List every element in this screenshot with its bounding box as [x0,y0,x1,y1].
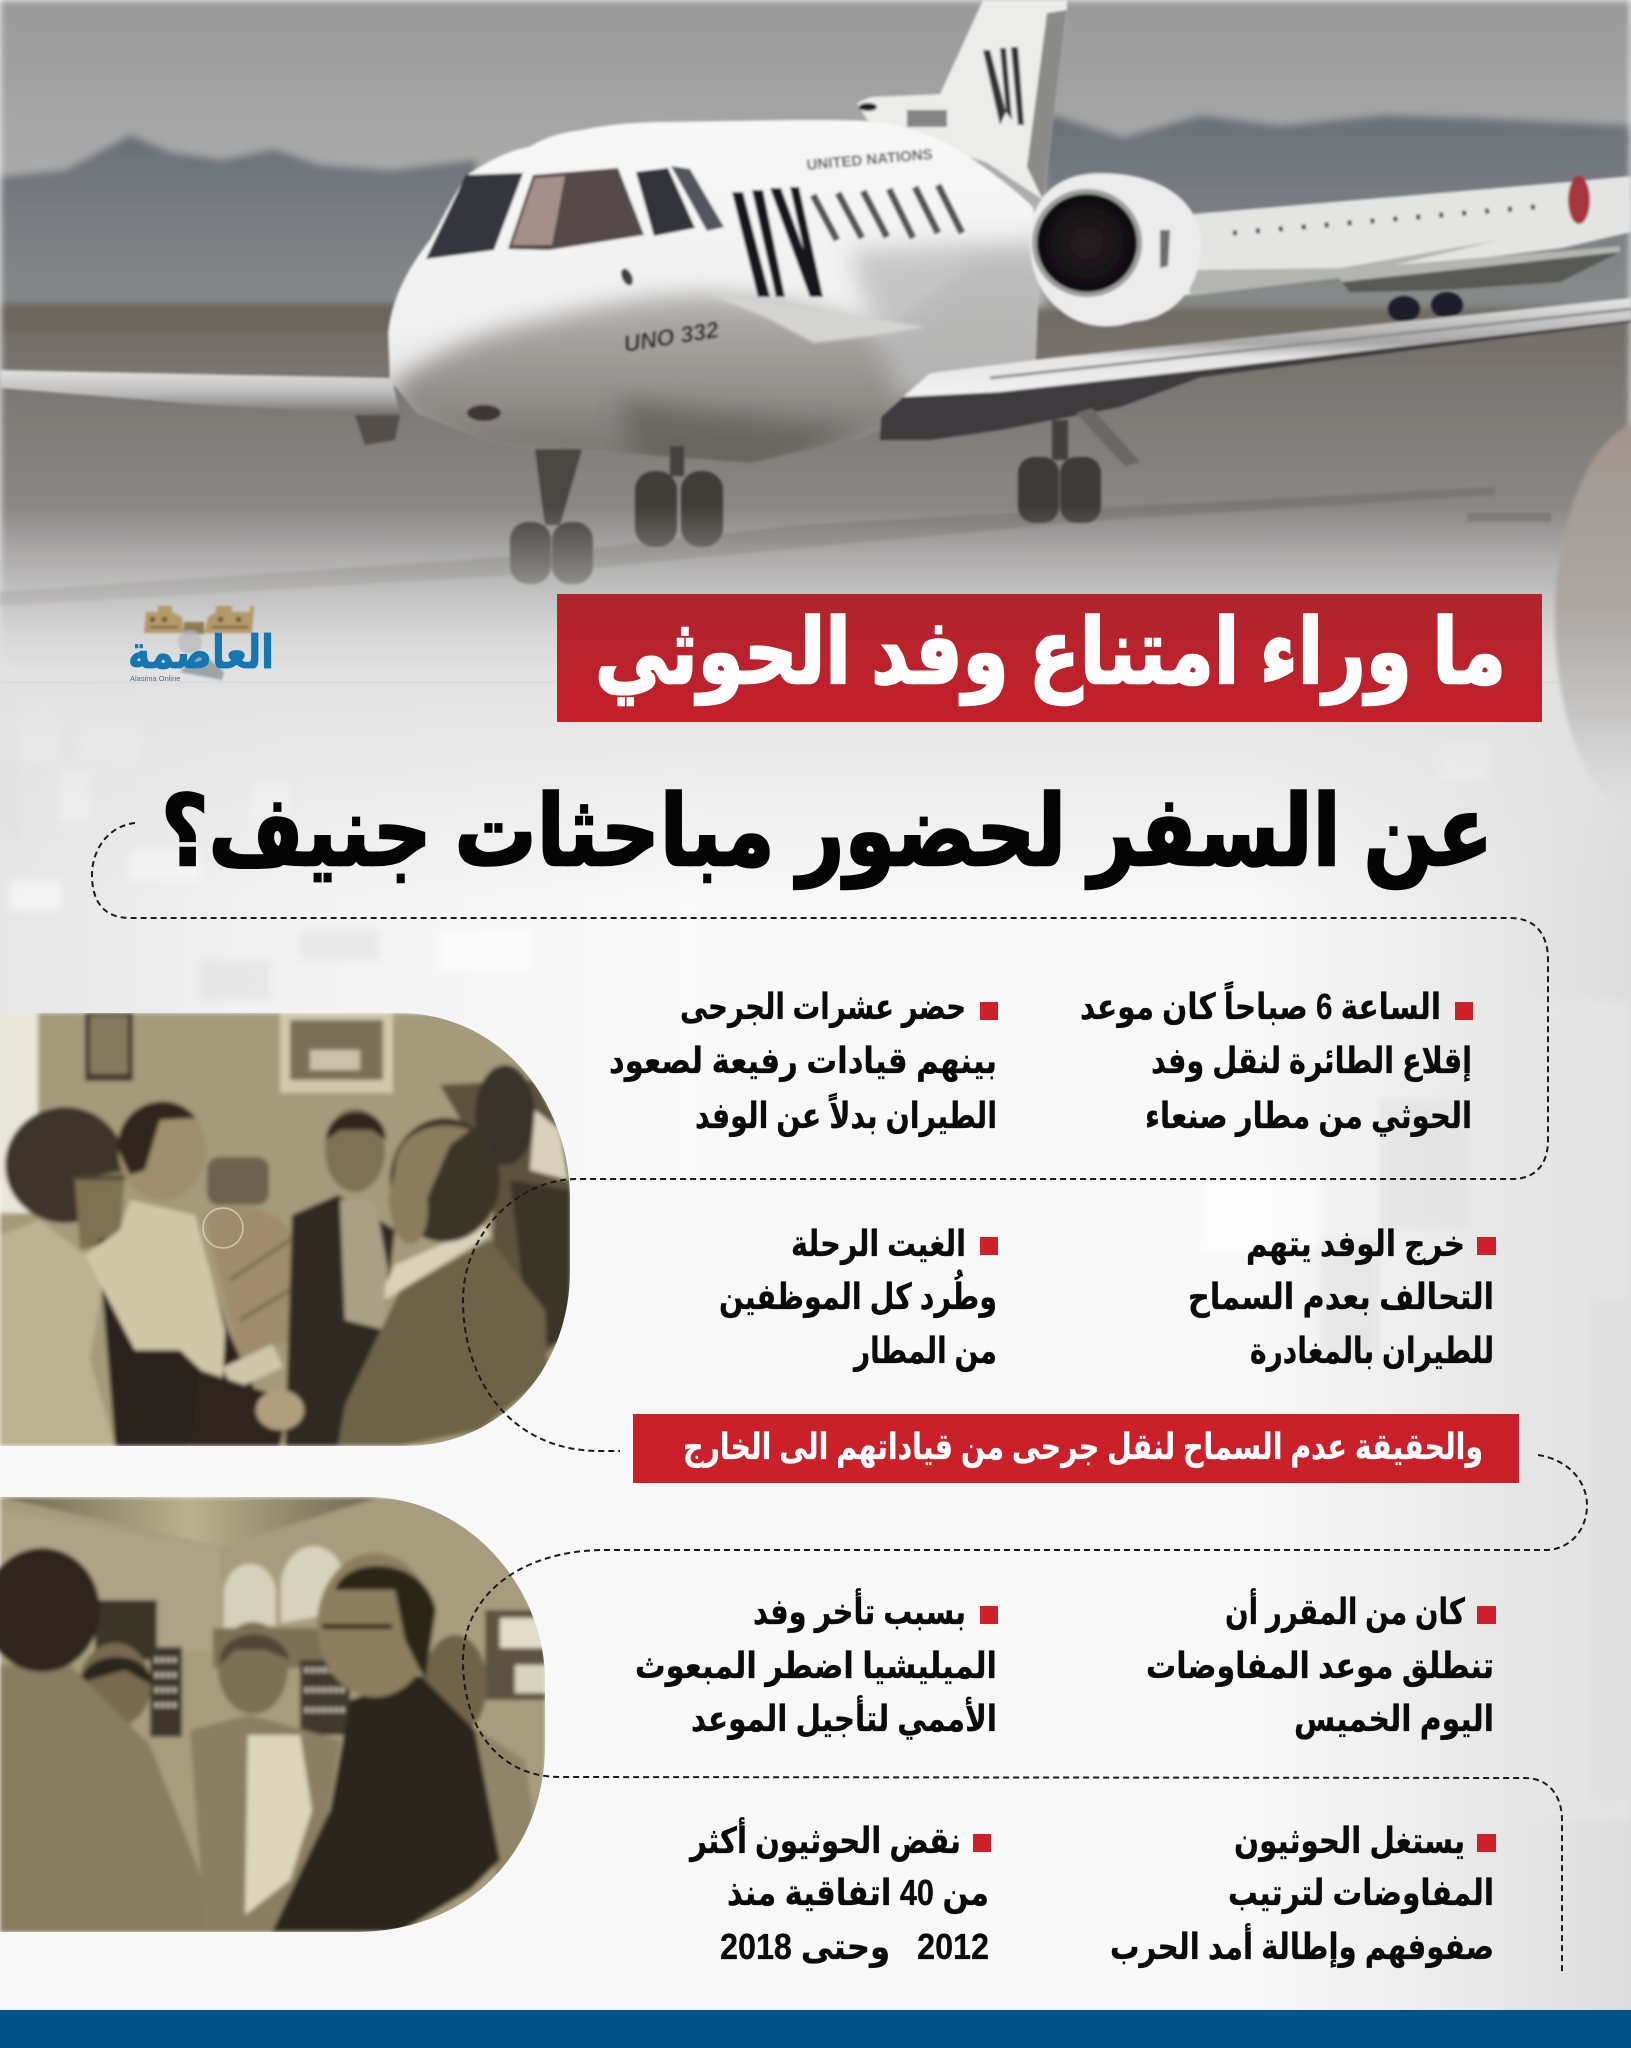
main wing [880,298,1631,440]
bullet [980,1606,998,1624]
bullet [1477,1834,1496,1852]
bullet [973,1834,991,1852]
person: man with glasses and dark jacket [272,1553,500,1932]
text block: flight cancelled [719,1223,998,1372]
bullet [1477,1237,1496,1255]
person: man in scarf [85,1100,290,1446]
bullet [1455,1002,1473,1020]
text block: flight cancelled: الغيت الرحلة [791,1223,966,1265]
person: centre man in striped shirt [285,1108,395,1446]
footer bar [0,2010,1631,2048]
foreground ball shape [1555,420,1631,820]
person: bald man in jacket [338,1118,548,1446]
handshake [256,1390,304,1430]
photo: delegation meeting, handshake [0,1013,571,1446]
logo wordmark: العاصمة [128,626,274,678]
sky, mountains and ground [0,0,1631,679]
text block: flight cancelled: وطُرد كل الموظفين [719,1269,997,1318]
text block: talks were scheduled: تنطلق موعد المفاوضات [1146,1645,1494,1687]
text block: departure time: إقلاع الطائرة لنقل وفد [1151,1040,1472,1082]
tail fin [857,0,1067,200]
logo tagline: Alasima Online [130,674,180,683]
text block: envoy postponed: الأممي لتأجيل الموعد [691,1695,997,1740]
text block: broken agreements [688,1817,991,1968]
person: man in white shirt [190,1622,340,1932]
left wing [0,370,400,416]
person: man at right [422,1634,534,1875]
text block: delegation accuses coalition: للطيران بالمغادرة [1250,1330,1494,1372]
engine [1030,173,1201,326]
icon: twin tower houses [144,606,254,680]
person: man from behind, left [0,1548,220,1932]
text block: envoy postponed [635,1588,998,1740]
title banner [557,594,1542,722]
UN stripes [732,187,823,297]
dashed connector: banner to lower panels [463,1455,1587,1972]
person: man at back left [79,1643,152,1727]
callout: the truth [633,1414,1519,1483]
fuselage lettering: UNITED NATIONS [806,146,933,174]
text block: Houthis exploit talks: يستغل الحوثيون [1234,1820,1465,1862]
text block: delegation accuses coalition: خرج الوفد يتهم [1246,1223,1465,1265]
cabin window slots [813,185,962,240]
text block: wounded attended [609,986,998,1137]
text block: broken agreements: نقض الحوثيون أكثر [688,1817,961,1862]
photo: delegation in decorated room [0,1497,546,1933]
text block: wounded attended: بينهم قيادات رفيعة لصعود [609,1040,997,1082]
text block: departure time: الحوثي من مطار صنعاء [1145,1095,1472,1137]
person: left man with glasses [0,1107,126,1446]
text block: Houthis exploit talks [1110,1820,1496,1968]
cockpit windows [426,166,724,259]
text block: departure time: الساعة 6 صباحاً كان موعد [1080,981,1441,1028]
fuselage [388,120,1050,480]
landing gear [510,408,1140,584]
text block: broken agreements: من 40 اتفاقية منذ [727,1872,989,1914]
text block: Houthis exploit talks: صفوفهم وإطالة أمد الحرب [1110,1923,1494,1968]
logo: Al-Asima Online [128,606,274,683]
text block: Houthis exploit talks: المفاوضات لترتيب [1228,1872,1494,1914]
runway shadows [0,487,1495,606]
bullet [1477,1606,1496,1624]
bullet [980,1002,998,1020]
text block: broken agreements: 2012 وحتى 2018 [720,1926,989,1968]
text block: wounded attended: حضر عشرات الجرحى [680,986,966,1028]
text block: envoy postponed: الميليشيا اضطر المبعوث [635,1645,997,1687]
text block: delegation accuses coalition [1188,1223,1496,1372]
text block: talks were scheduled: اليوم الخميس [1294,1698,1494,1740]
second plane [1181,176,1631,322]
text block: wounded attended: الطيران بدلاً عن الوفد [695,1093,997,1137]
text block: departure time [1080,981,1473,1137]
dashed connector: title to first panel to banner [92,823,1548,1451]
text block: talks were scheduled: كان من المقرر أن [1225,1588,1465,1633]
person: far right background [440,1065,571,1360]
text block: envoy postponed: بسبب تأخر وفد [753,1588,966,1633]
bullet [980,1237,998,1255]
text block: delegation accuses coalition: التحالف بعدم السماح [1188,1276,1494,1318]
photo: UN plane on the runway: UNO 332 [622,316,721,357]
text block: flight cancelled: من المطار [852,1330,997,1372]
text block: talks were scheduled [1146,1588,1496,1740]
photo: UN plane on the runway [0,0,1631,820]
